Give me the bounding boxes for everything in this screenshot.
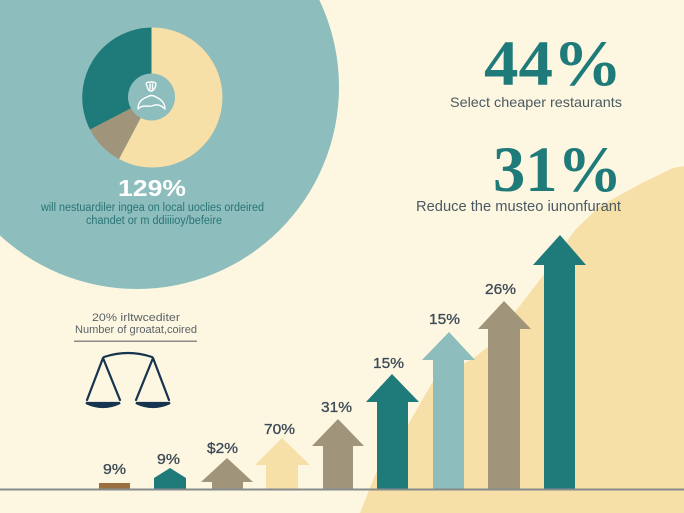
panel: teal circle [0, 0, 339, 289]
arrow 3: taupe [201, 458, 253, 489]
arrow 8: taupe [478, 301, 531, 489]
background wave: tan area [360, 166, 684, 513]
arrow 4: cream [255, 438, 310, 489]
icon: balance scale [86, 353, 170, 407]
donut chart [82, 27, 222, 167]
heading: circle statistic: 129% [118, 175, 186, 201]
stat label: cheaper restaurants: Select cheaper restaurants [450, 94, 622, 110]
arrow value labels [103, 282, 516, 478]
axis baseline [0, 488, 684, 490]
donut segment: taupe [90, 98, 152, 159]
arrow 6: dark teal [366, 374, 419, 489]
text block: circle description: will nestuardiler ingea on local uoclies ordeired [40, 202, 264, 214]
arrow value labels: 26% [485, 282, 516, 298]
text block: scale caption: Number of groatat,coired [75, 324, 197, 336]
icon: person with dish [138, 82, 165, 109]
donut segment: tan [119, 27, 222, 167]
arrow 9: dark teal [533, 235, 586, 489]
text block: circle description: chandet or m ddiiiioy/befeire [86, 215, 222, 227]
arrow value labels: 70% [264, 422, 295, 438]
arrow 7: light teal [422, 332, 475, 489]
arrow value labels: 15% [429, 312, 460, 328]
arrow 5: taupe [312, 419, 364, 489]
arrow value labels: 15% [373, 356, 404, 372]
stat label: reduce: Reduce the musteo iunonfurant [416, 198, 622, 215]
stat: 31 percent: 31% [493, 134, 622, 206]
arrow value labels: 9% [157, 452, 180, 468]
bar 1: brown block [99, 483, 130, 489]
arrow value labels: 9% [103, 462, 126, 478]
text block: scale caption: 20% irltwcediter [92, 312, 180, 324]
text block: scale caption [74, 312, 197, 342]
donut centre hole [128, 74, 175, 120]
text block: circle description [40, 202, 264, 227]
arrow 2: teal house [154, 468, 186, 489]
arrow value labels: 31% [321, 400, 352, 416]
arrow value labels: $2% [207, 441, 238, 457]
stat: 44 percent: 44% [484, 28, 622, 100]
donut segment: dark teal [82, 28, 152, 130]
